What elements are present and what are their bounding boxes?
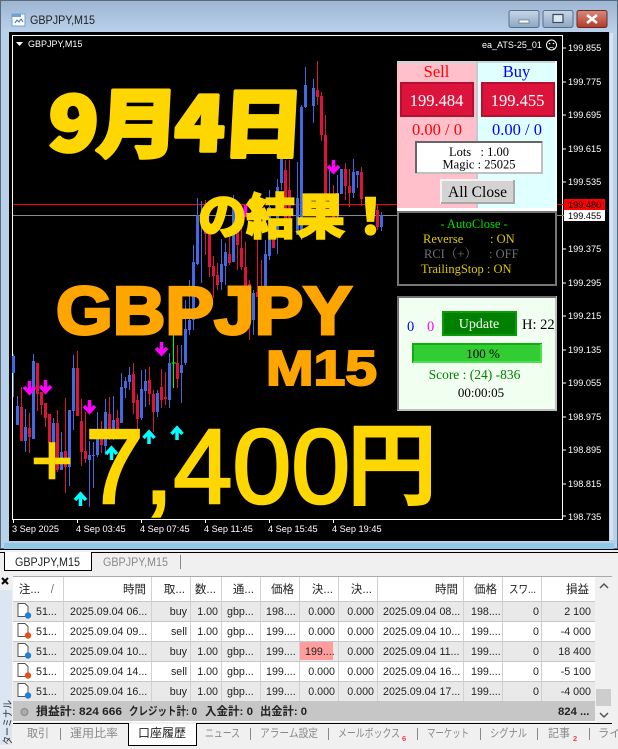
expert advisor label: ea_ATS-25_01 (482, 40, 542, 50)
price axis: 199.480 (568, 200, 601, 210)
panel: sell and buy trade panel: 0.00 / 0 (412, 120, 462, 139)
window: chart window frame (0, 0, 618, 549)
terminal tab bar: 6 (402, 734, 406, 743)
terminal tab bar: アラーム設定 (260, 727, 318, 740)
table row: trade 3: 18 400 (558, 646, 591, 658)
headline: date: 9月4日 (46, 64, 308, 173)
panel: auto close settings: RCI（+） (424, 247, 477, 261)
scrollbar (595, 577, 612, 721)
price axis: 199.615 (568, 144, 601, 154)
time axis: 4 Sep 15:45 (268, 524, 318, 534)
panel: update and score: H: 22 (522, 317, 555, 333)
price axis: 198.975 (568, 412, 601, 422)
table row: trade 4: -5 100 (561, 666, 591, 678)
panel: sell and buy trade panel: 199.484 (410, 91, 463, 110)
table row: trade 2: gbp... (227, 626, 254, 638)
table row: trade 1: 0.000 (347, 606, 374, 618)
price axis: 198.895 (568, 445, 601, 455)
table row: trade 4: 0.000 (308, 666, 335, 678)
table row: trade 2: 0.000 (347, 626, 374, 638)
price axis: 199.135 (568, 345, 601, 355)
terminal tab bar: 取引 (27, 726, 49, 740)
table row: trade 1: 2025.09.04 08... (383, 606, 460, 618)
price axis: 199.375 (568, 244, 601, 254)
terminal tab bar: メールボックス (338, 727, 400, 740)
panel: update and score: 100 % (466, 346, 500, 361)
table row: trade 1: 2025.09.04 06... (70, 606, 147, 618)
table row: trade 4: 199.... (471, 666, 501, 678)
table row: trade 1 (36, 606, 591, 618)
panel: update and score: 00:00:05 (458, 385, 504, 400)
headline: profit amount: 7,400 (85, 408, 350, 526)
table row: trade 5: 199.... (471, 686, 501, 698)
table row: trade 5: gbp... (227, 686, 254, 698)
table row: trade 2: sell (171, 626, 187, 638)
table row: trade 3: 1.00 (197, 646, 218, 658)
price axis: 199.055 (568, 378, 601, 388)
headline: result: の結果！ (198, 178, 395, 249)
panel: auto close settings (398, 212, 556, 285)
table row: trade 3: gbp... (227, 646, 254, 658)
panel: sell and buy trade panel: Magic : 25025 (443, 158, 515, 172)
table header: 価格 (271, 582, 294, 596)
table row: trade 4: 1.00 (197, 666, 218, 678)
table row: trade 5: 0.000 (308, 686, 335, 698)
headline: timeframe: M15 (266, 342, 377, 396)
table row: trade 3: 51... (36, 646, 57, 658)
panel: sell and buy trade panel: All Close (448, 184, 507, 201)
table row icons (18, 604, 31, 699)
table header: スワ... (509, 584, 536, 596)
panel: update and score: Score : (24) -836 (429, 367, 521, 382)
table header (19, 582, 589, 596)
table row: trade 5: 2025.09.04 16... (70, 686, 147, 698)
price axis: 198.815 (568, 479, 601, 489)
table row: trade 2: 0 (533, 626, 539, 638)
table row: trade 1: buy (170, 606, 188, 618)
terminal tab bar: シグナル (490, 726, 527, 740)
table header: 数... (195, 583, 216, 596)
panel: auto close settings: : OFF (489, 247, 519, 261)
table header: 決... (351, 583, 372, 596)
terminal side strip (0, 578, 14, 745)
chart symbol label: GBPJPY,M15 (28, 39, 82, 49)
window title: GBPJPY,M15 (30, 15, 95, 27)
summary bar: 出金計: 0 (260, 704, 307, 718)
table row: trade 2 (36, 626, 591, 638)
table row: trade 4: 2025.09.04 14... (70, 666, 147, 678)
table row: trade 1: 198.... (471, 606, 501, 618)
terminal tab bar: ニュース (205, 728, 240, 740)
table header: 注... (19, 583, 40, 596)
table row: trade 5: buy (170, 686, 188, 698)
icon: chart window icon (12, 14, 25, 26)
table row: trade 4: 199.... (266, 666, 296, 678)
panel: sell and buy trade panel: Buy (503, 62, 531, 81)
table row: trade 4 (36, 666, 591, 678)
table row: trade 2: 51... (36, 626, 57, 638)
table row: trade 1: 0.000 (308, 606, 335, 618)
table row: trade 2: 199.... (266, 626, 296, 638)
table row: trade 4: sell (171, 666, 187, 678)
terminal tab bar (13, 724, 618, 746)
table header: 価格 (474, 582, 497, 596)
panel: auto close settings: Reverse (423, 232, 464, 246)
table row: trade 5: 0 (533, 686, 539, 698)
summary bar: 824 ... (558, 706, 589, 718)
table row: trade 3: 2025.09.04 10... (70, 646, 147, 658)
table row: trade 1: 0 (533, 606, 539, 618)
table row: trade 4: 0.000 (347, 666, 374, 678)
summary bar: クレジット計: 0 (129, 704, 197, 718)
table row: trade 4: gbp... (227, 666, 254, 678)
panel: sell and buy trade panel: 0.00 / 0 (492, 120, 542, 139)
table header: 時間 (123, 583, 146, 596)
table row: trade 2: 2025.09.04 10... (383, 626, 460, 638)
candlestick chart (14, 61, 382, 507)
panel: auto close settings: - AutoClose - (440, 217, 508, 231)
terminal side strip: ターミナル (2, 700, 14, 745)
table row: trade 2: -4 000 (561, 626, 591, 638)
time axis: 4 Sep 11:45 (204, 524, 253, 534)
summary bar: 入金計: 0 (205, 704, 253, 718)
table row: trade 5: 2025.09.04 17... (383, 686, 460, 698)
headline: profit amount: + (31, 421, 73, 501)
chart tab bar: GBPJPY,M15 (15, 557, 80, 569)
headline: currency pair: GBPJPY (56, 273, 352, 349)
history table (13, 576, 612, 722)
table header: 通... (233, 583, 254, 596)
panel: sell and buy trade panel: 199.455 (491, 91, 544, 110)
table row: trade 3: 199.... (266, 646, 296, 658)
panel: auto close settings: : ON (490, 232, 515, 246)
chart tab bar (0, 550, 618, 570)
table row: trade 3: 0 (533, 646, 539, 658)
price axis: 199.215 (568, 311, 601, 321)
price axis: 199.855 (568, 43, 601, 53)
table row: trade 3 (36, 646, 591, 658)
panel: update and score: Update (459, 317, 499, 332)
signal arrows (24, 160, 339, 506)
price axis: 198.735 (568, 512, 601, 522)
table header: 時間 (435, 583, 458, 596)
table row: trade 4: 51... (36, 666, 57, 678)
window buttons (509, 10, 607, 28)
chart area background (9, 32, 609, 541)
table row: trade 1: 2 100 (564, 606, 591, 618)
table header: / (51, 584, 55, 596)
time axis (12, 520, 382, 534)
chart tab bar: GBPJPY,M15 (103, 557, 168, 569)
panel: update and score: 0 (407, 319, 414, 335)
summary bar (13, 701, 595, 721)
table row: trade 5: 1.00 (197, 686, 218, 698)
table row: trade 2: 2025.09.04 09... (70, 626, 147, 638)
table row: trade 5: 0.000 (347, 686, 374, 698)
table header: 取... (164, 584, 185, 596)
price axis (563, 43, 605, 522)
table row: trade 4: 2025.09.04 16... (383, 666, 460, 678)
table row: trade 3: 0.000 (347, 646, 374, 658)
table row: trade 2: 199.... (471, 626, 501, 638)
table header: 損益 (566, 582, 589, 596)
table row: trade 5: -4 000 (561, 686, 591, 698)
table row: trade 3: 2025.09.04 11... (383, 646, 459, 658)
table row: trade 1: 51... (36, 606, 57, 618)
table header: 決... (312, 583, 333, 596)
table row: trade 4: 0 (533, 666, 539, 678)
summary bar: 損益計: 824 666 (36, 704, 122, 718)
time axis: 4 Sep 03:45 (76, 524, 126, 534)
table row: trade 1: 1.00 (197, 606, 218, 618)
table row: trade 2: 1.00 (197, 626, 218, 638)
panel: sell and buy trade panel: Sell (424, 62, 450, 81)
panel: update and score (398, 297, 556, 410)
headline: profit amount: 円 (347, 393, 437, 523)
time axis: 4 Sep 07:45 (140, 524, 190, 534)
price axis: 199.455 (568, 211, 601, 221)
table row: trade 5: 199.... (266, 686, 296, 698)
table row: trade 3: buy (170, 646, 188, 658)
panel: sell and buy trade panel: Lots : 1.00 (449, 145, 509, 159)
panel: update and score: 0 (427, 319, 434, 335)
table row: trade 3: 199.... (305, 646, 335, 658)
price axis: 199.695 (568, 110, 601, 120)
headline: profit amount (31, 393, 437, 526)
price axis: 199.535 (568, 177, 601, 187)
terminal tab bar: 記事 (548, 727, 570, 740)
table row: trade 1: 198.... (266, 606, 296, 618)
panel: auto close settings: TrailingStop : ON (421, 262, 512, 276)
table row: trade 1: gbp... (227, 606, 254, 618)
price axis: 199.775 (568, 77, 601, 87)
horizontal price lines (13, 204, 566, 216)
time axis: 4 Sep 19:45 (332, 524, 382, 534)
panel: sell and buy trade panel (397, 61, 557, 211)
price axis: 199.295 (568, 278, 601, 288)
time axis: 3 Sep 2025 (12, 524, 59, 534)
terminal tab bar: 2 (573, 734, 577, 743)
table row: trade 5 (36, 686, 591, 698)
terminal tab bar: マーケット (427, 727, 469, 740)
table row: trade 5: 51... (36, 686, 57, 698)
terminal tab bar: 運用比率 (70, 727, 118, 740)
table row: trade 2: 0.000 (308, 626, 335, 638)
table row: trade 3: 199.... (471, 646, 501, 658)
terminal tab bar: 口座履歴 (138, 726, 186, 740)
